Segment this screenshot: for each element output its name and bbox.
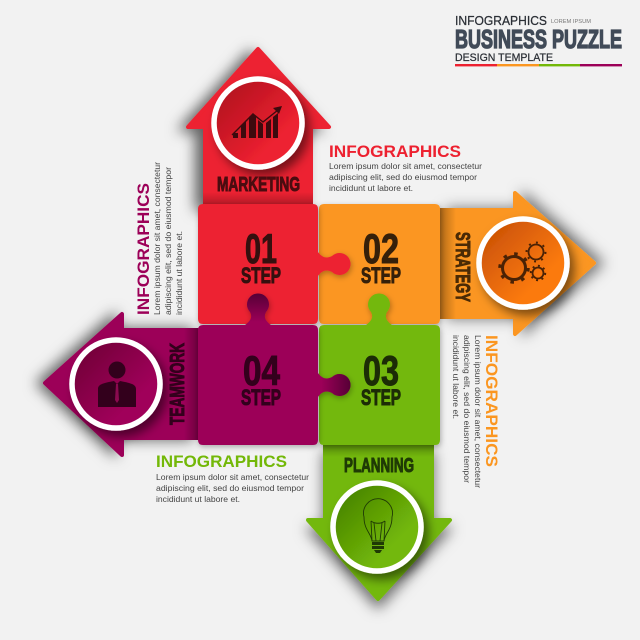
heading: orange: INFOGRAPHICS (482, 335, 500, 467)
heading: green: INFOGRAPHICS (156, 453, 287, 471)
piece: step 01 (198, 204, 351, 324)
arrow: marketing (188, 49, 329, 206)
label: marketing: MARKETING (217, 174, 300, 196)
subtitle: design template: DESIGN TEMPLATE (455, 52, 553, 64)
puzzle grid (198, 204, 440, 445)
text block: orange (451, 335, 500, 488)
icon: chart badge (214, 79, 302, 167)
icon: gears badge (479, 219, 567, 307)
knob shading (245, 293, 351, 397)
text block: purple (135, 162, 184, 315)
body: red: adipiscing elit, sed do eiusmod tempor (329, 172, 477, 182)
body: orange: adipiscing elit, sed do eiusmod tempor (462, 335, 472, 483)
piece: step 04 (198, 293, 351, 445)
heading: purple: INFOGRAPHICS (135, 183, 153, 315)
body: purple: incididunt ut labore et. (174, 231, 184, 315)
body: purple: adipiscing elit, sed do eiusmod tempor (163, 167, 173, 315)
label: teamwork: TEAMWORK (167, 343, 189, 425)
text block: green (156, 453, 309, 504)
icon: light bulb badge (333, 483, 421, 571)
label: step 1: STEP (241, 263, 281, 288)
label: step 2: STEP (361, 263, 401, 288)
body: green: incididunt ut labore et. (156, 494, 240, 504)
label: strategy: STRATEGY (451, 232, 473, 302)
title: infographics: INFOGRAPHICS (455, 14, 547, 28)
body: orange: Lorem ipsum dolor sit amet, consectetur (473, 335, 483, 488)
text block: red (329, 143, 482, 193)
body: green: adipiscing elit, sed do eiusmod tempor (156, 483, 304, 493)
label: step 3: STEP (361, 385, 401, 410)
number: 03: 03 (363, 347, 399, 394)
body: red: incididunt ut labore et. (329, 183, 413, 193)
body: orange: incididunt ut labore et. (451, 335, 461, 419)
number: 01: 01 (245, 225, 277, 272)
icon: businessman badge (72, 340, 160, 428)
tag: lorem ipsum: LOREM IPSUM (551, 19, 591, 25)
colour rule (455, 64, 622, 66)
arrow: teamwork (45, 314, 198, 455)
piece: step 02 (319, 204, 440, 324)
heading: red: INFOGRAPHICS (329, 143, 461, 161)
body: green: Lorem ipsum dolor sit amet, consectetur (156, 472, 309, 482)
body: red: Lorem ipsum dolor sit amet, consectetur (329, 161, 482, 171)
number: 04: 04 (243, 347, 281, 394)
number: 02: 02 (363, 225, 399, 272)
arrow: planning (308, 445, 450, 599)
arrow: strategy (440, 193, 594, 334)
label: step 4: STEP (241, 385, 281, 410)
body: purple: Lorem ipsum dolor sit amet, consectetur (152, 162, 162, 315)
title block (455, 14, 622, 66)
piece: step 03 (319, 293, 440, 445)
label: planning: PLANNING (344, 455, 414, 477)
